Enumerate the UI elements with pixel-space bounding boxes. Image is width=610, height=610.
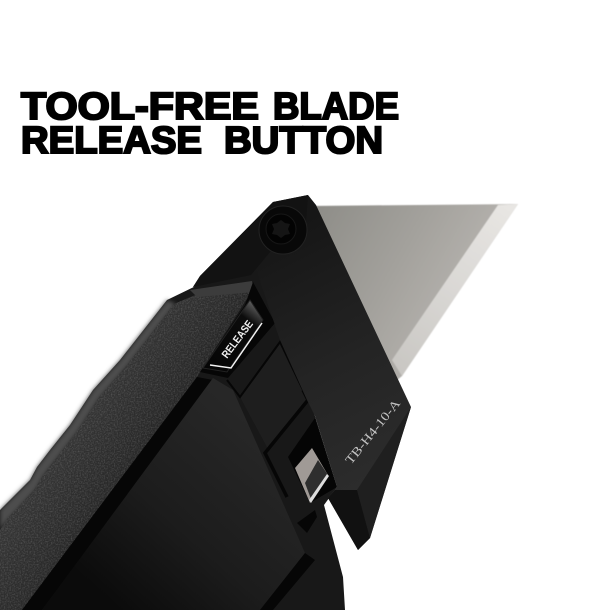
release button — [203, 300, 263, 372]
screw — [259, 206, 307, 254]
textured grip panel — [0, 291, 252, 610]
centre recessed strip — [22, 377, 213, 610]
grip edge bumps — [0, 300, 176, 530]
knife body — [0, 270, 345, 610]
utility blade — [310, 204, 518, 390]
body silhouette — [0, 270, 345, 610]
head lower facet — [357, 407, 411, 538]
window panel outline — [227, 342, 303, 397]
head lower lip — [328, 490, 370, 550]
button recess — [200, 282, 275, 378]
release label: RELEASE — [220, 318, 256, 361]
slider window — [288, 418, 337, 503]
screw torx socket — [272, 220, 290, 238]
blade head — [193, 195, 411, 550]
release underline — [210, 323, 262, 368]
title: BUTTON — [224, 120, 383, 162]
grip top bevel — [190, 281, 254, 297]
recessed window panel — [240, 342, 307, 449]
blade part number: TB-H4-10-A — [342, 397, 403, 467]
title: TOOL-FREE — [21, 86, 259, 128]
head upper band — [193, 195, 308, 287]
title — [21, 86, 399, 162]
lower panel ridge — [260, 553, 315, 610]
title: BLADE — [273, 86, 399, 128]
slider frame recess — [265, 390, 308, 497]
blade sharpened bevel — [392, 204, 518, 376]
blade in slider window — [295, 448, 328, 503]
lower dark wedge — [297, 510, 317, 533]
title: RELEASE — [21, 120, 202, 162]
smooth lower panel — [42, 378, 305, 610]
